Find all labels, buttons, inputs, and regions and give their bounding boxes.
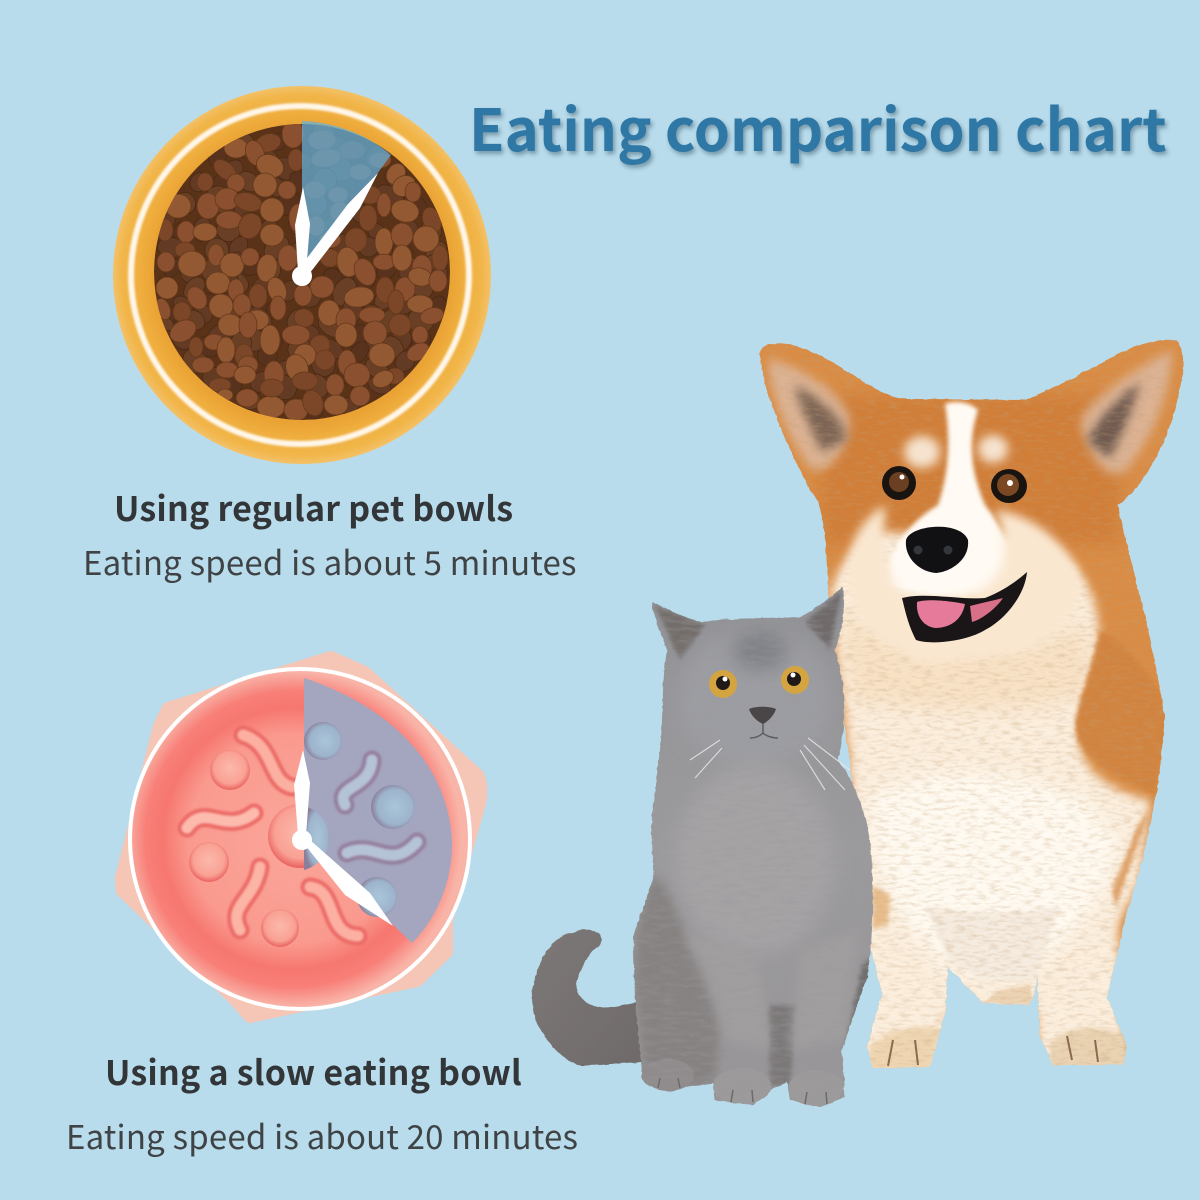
heading: slow bowl: Using a slow eating bowl bbox=[105, 1046, 522, 1095]
blue five-minute sector bbox=[302, 121, 391, 275]
cat paw toes bbox=[658, 1078, 827, 1104]
dog orange flank patch bbox=[1075, 630, 1170, 795]
clock hands bbox=[292, 750, 393, 926]
dog ears bbox=[768, 358, 850, 470]
grey cat bbox=[532, 580, 880, 1115]
tongue bbox=[917, 600, 965, 628]
cheeks bbox=[848, 505, 1081, 665]
slow eating bowl with clock overlay bbox=[121, 657, 481, 1017]
dog face bbox=[848, 402, 1081, 665]
lilac twenty-minute sector bbox=[304, 678, 452, 943]
title: Eating comparison chart bbox=[469, 84, 1167, 168]
heading: regular bowl: Using regular pet bowls bbox=[114, 482, 513, 531]
bowl interior bbox=[132, 671, 468, 1007]
cat nose and mouth bbox=[749, 707, 776, 724]
dog chest shadow bbox=[925, 905, 1060, 980]
eyes bbox=[882, 466, 916, 500]
cat eyes bbox=[709, 670, 737, 698]
regular bowl with clock overlay bbox=[113, 86, 491, 464]
dog orange coat bbox=[740, 320, 1190, 1080]
clock hands bbox=[292, 173, 378, 286]
cat fur texture bbox=[646, 604, 868, 1079]
cat haunch bbox=[634, 875, 720, 1085]
paw toes bbox=[888, 1036, 1098, 1066]
bowl raised dots bbox=[210, 750, 250, 790]
bowl rim bbox=[113, 86, 491, 464]
text: regular bowl speed: Eating speed is about 5 minutes bbox=[83, 537, 577, 585]
cat ears bbox=[655, 605, 705, 660]
mouth bbox=[902, 572, 1027, 642]
corgi dog bbox=[740, 320, 1190, 1080]
cat paws bbox=[642, 1059, 694, 1091]
nose bbox=[906, 527, 968, 573]
dog fur texture bbox=[762, 340, 1184, 1068]
white blaze and muzzle bbox=[888, 402, 1011, 596]
sector ridges and dots bbox=[304, 722, 417, 917]
cat dark gap between legs bbox=[768, 1005, 797, 1085]
bowl white ring bbox=[130, 669, 470, 1009]
kibble in bowl bbox=[154, 124, 450, 420]
bowl ridges bbox=[187, 735, 358, 936]
dog paws bbox=[865, 1027, 942, 1072]
cat body and head bbox=[620, 580, 880, 1115]
cat tail bbox=[532, 930, 645, 1066]
cat face shading bbox=[686, 644, 823, 754]
dog cream chest and belly bbox=[830, 532, 1150, 1075]
cat chest bbox=[682, 772, 828, 948]
text: slow bowl speed: Eating speed is about 20 minutes bbox=[66, 1111, 578, 1159]
bowl star-shaped base bbox=[121, 657, 481, 1017]
cat front legs bbox=[709, 963, 772, 1046]
cat whiskers bbox=[690, 738, 850, 790]
bowl white highlight ring bbox=[131, 106, 469, 444]
